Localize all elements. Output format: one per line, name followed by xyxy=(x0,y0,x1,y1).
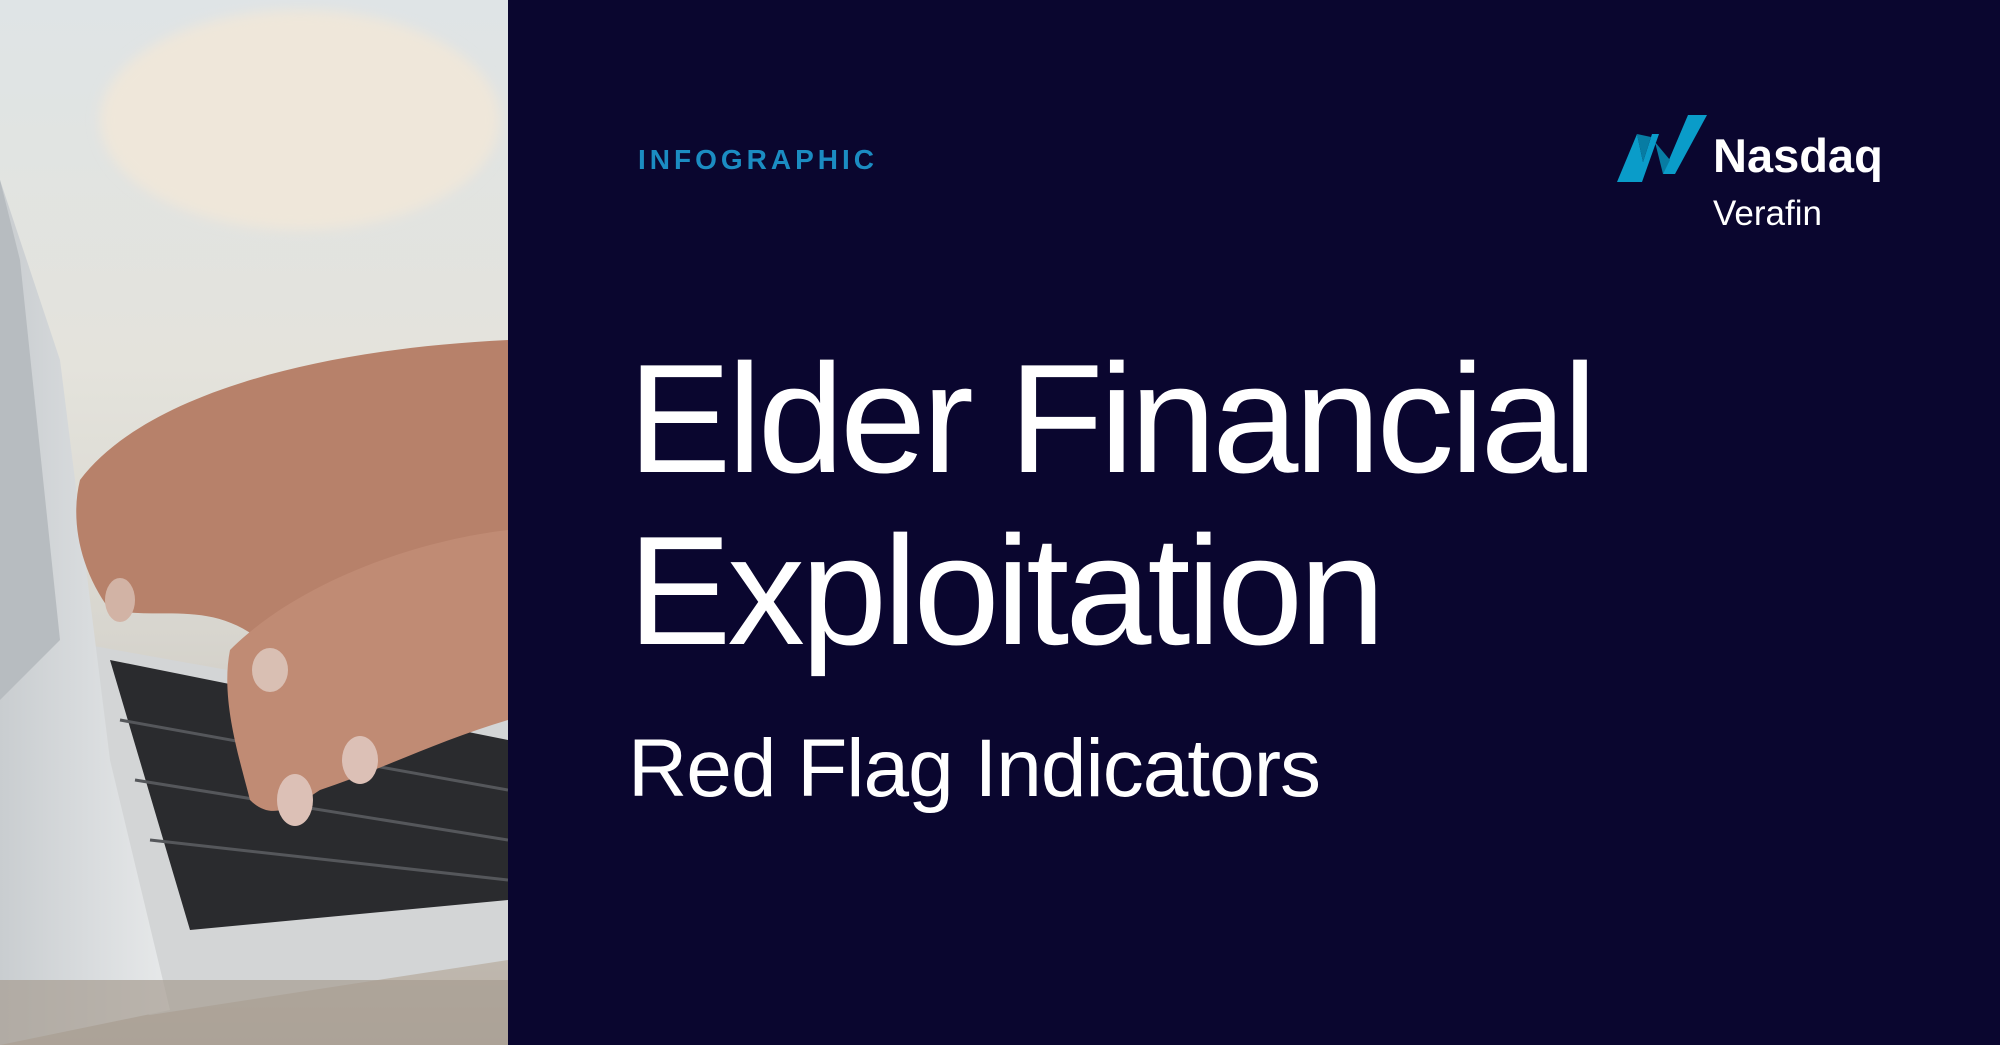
subtitle: Red Flag Indicators xyxy=(628,723,1320,814)
logo: Nasdaq Verafin: Verafin xyxy=(1713,194,1822,233)
title: Exploitation xyxy=(628,504,1381,677)
icon: Nasdaq mark xyxy=(1617,115,1707,182)
title: Elder Financial xyxy=(628,332,1593,505)
logo: Nasdaq Verafin xyxy=(1617,115,1883,233)
keyboard xyxy=(110,660,508,930)
laptop base xyxy=(60,640,508,1015)
hands xyxy=(76,340,508,640)
photo panel: hands typing on laptop xyxy=(0,0,508,1045)
logo: Nasdaq Verafin: Nasdaq xyxy=(1713,129,1883,182)
label: INFOGRAPHIC: INFOGRAPHIC xyxy=(638,144,878,175)
title xyxy=(628,332,1593,677)
laptop screen xyxy=(0,180,170,1045)
